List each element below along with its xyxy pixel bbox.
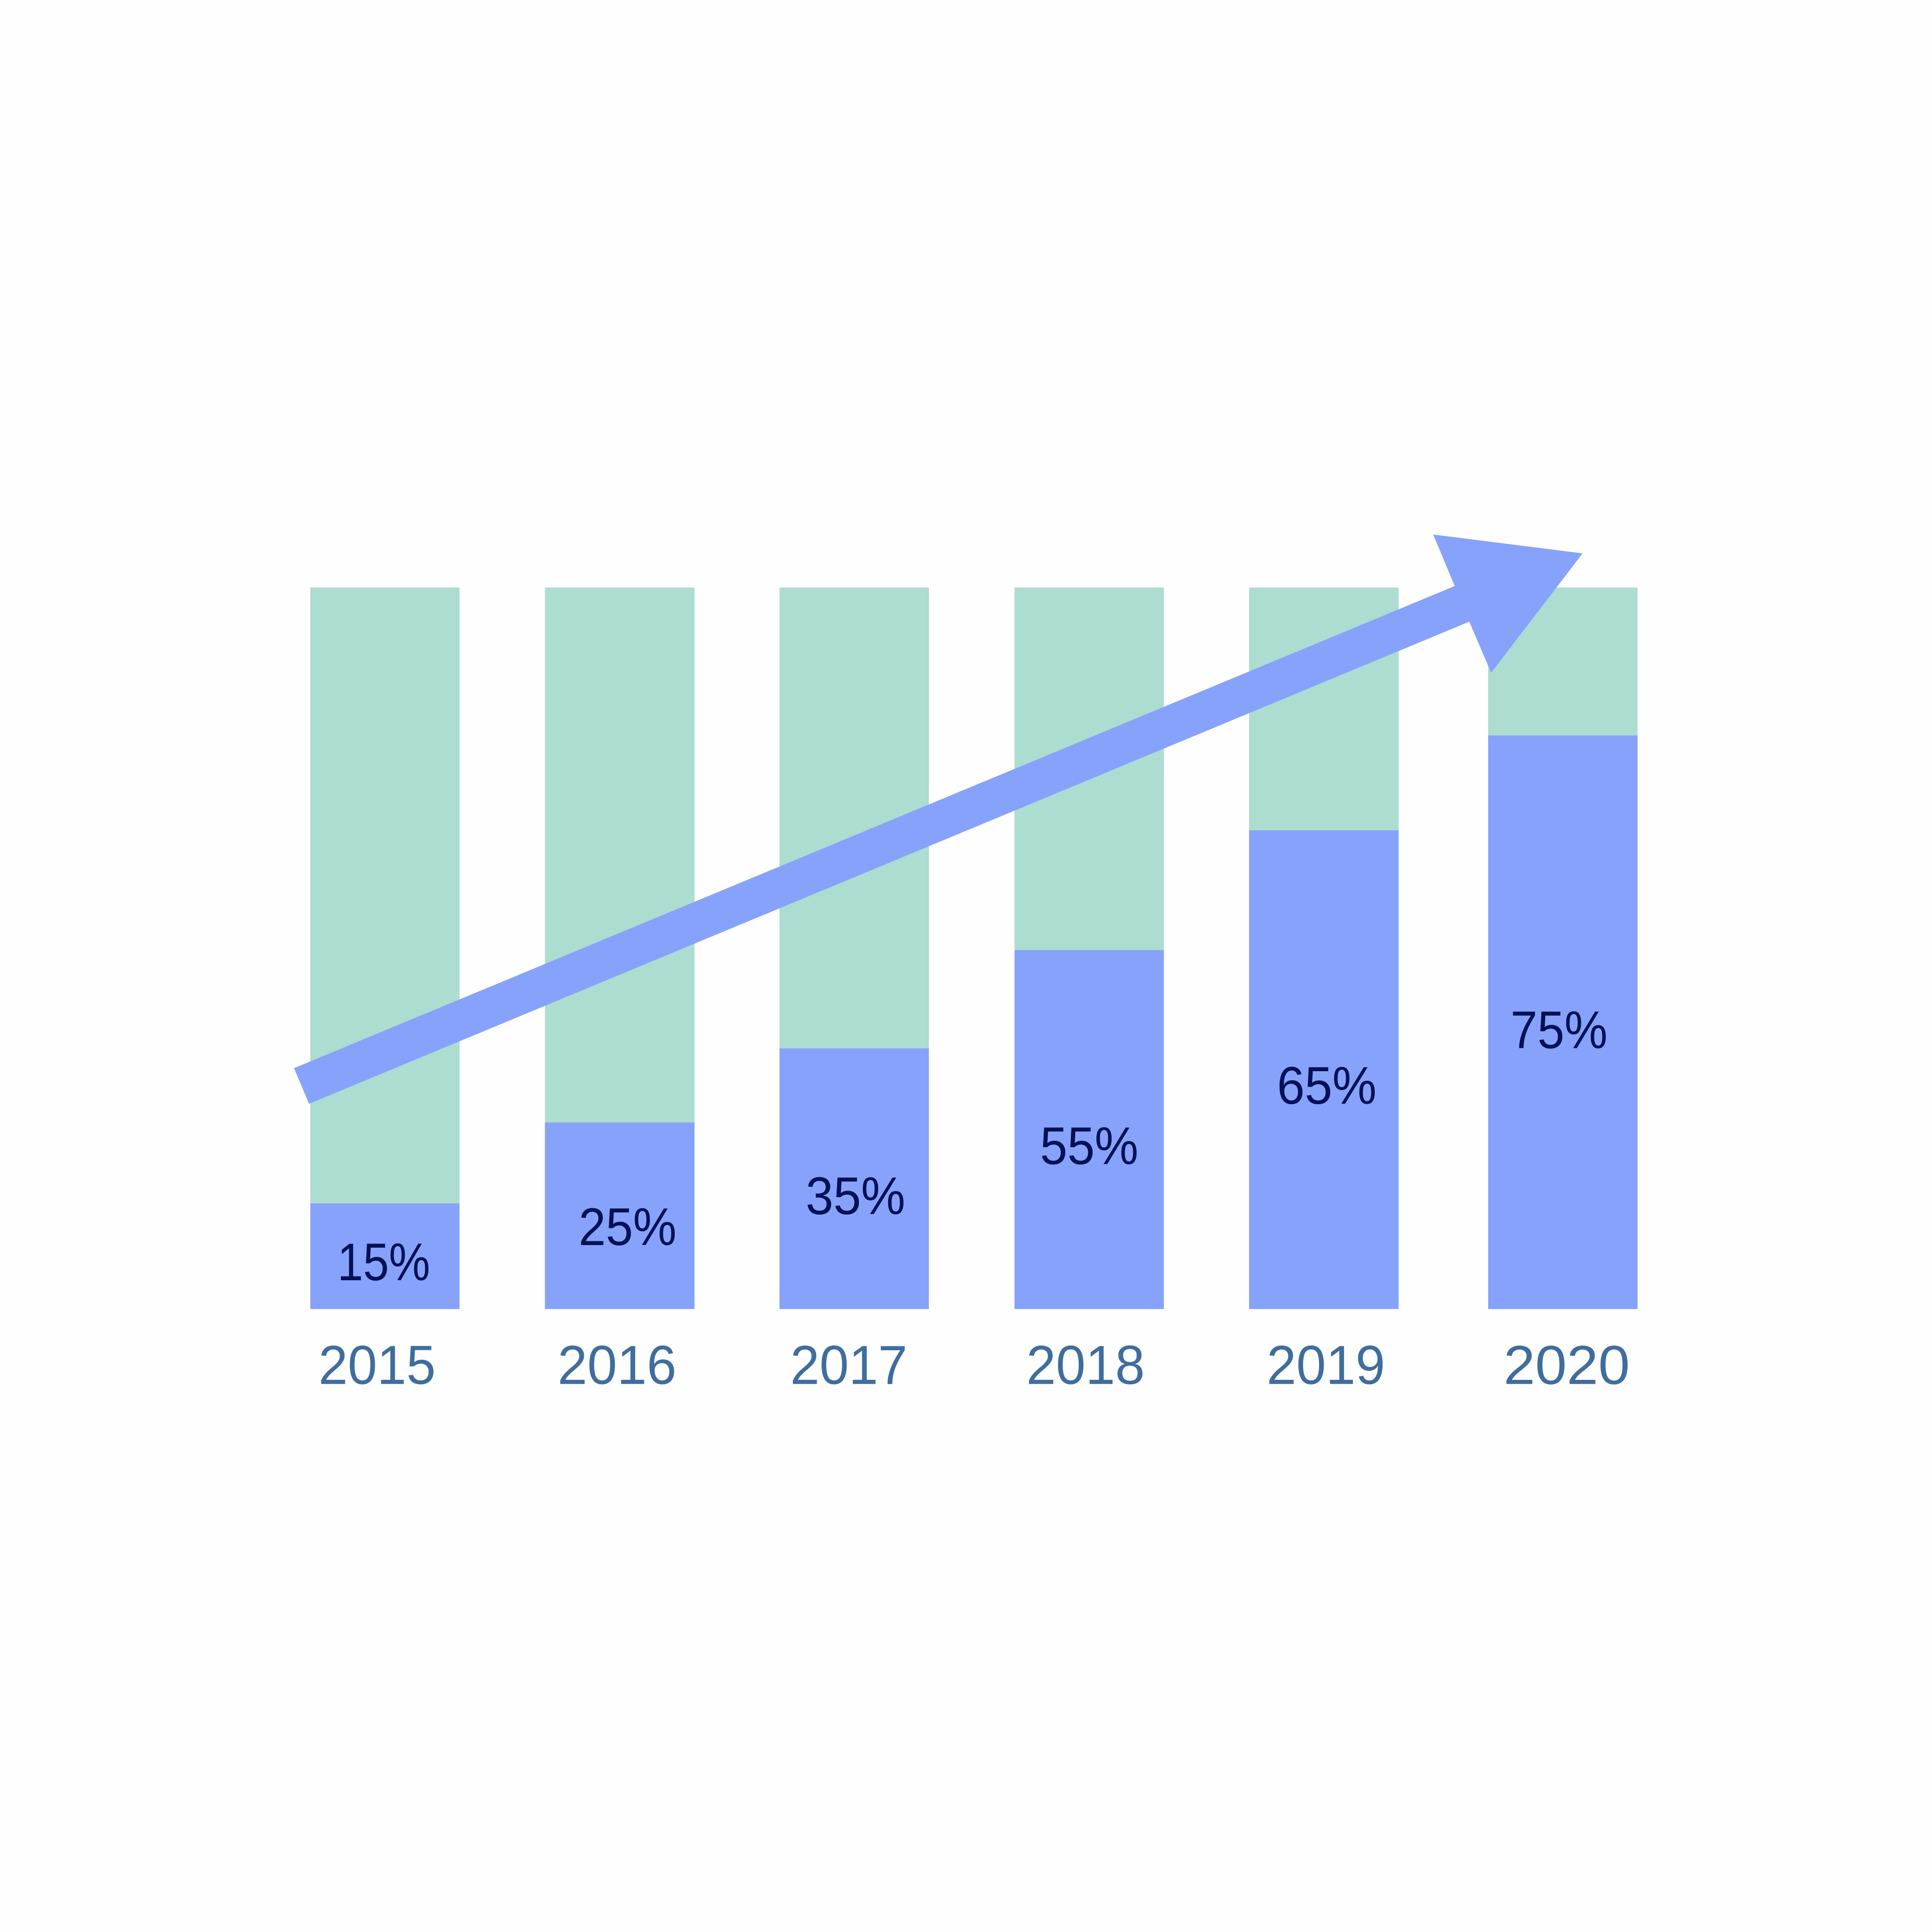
bar: 2015: [310, 587, 459, 1309]
arrow: upward trend: [294, 535, 1583, 1104]
year label: 2018: 2018: [1026, 1334, 1145, 1396]
bar: 2018: [1015, 587, 1164, 1309]
year label: 2017: 2017: [790, 1334, 907, 1396]
bar: 2017: [779, 587, 929, 1309]
value: 65%: 65%: [1277, 1056, 1377, 1115]
bar: 2020: [1488, 587, 1638, 1309]
bar: 2019: [1249, 587, 1398, 1309]
value: 35%: 35%: [806, 1166, 905, 1226]
value: 25%: 25%: [579, 1197, 676, 1257]
year label: 2019: 2019: [1267, 1334, 1385, 1396]
value: 75%: 75%: [1510, 1000, 1607, 1060]
bar: 2016: [545, 587, 695, 1309]
value: 55%: 55%: [1040, 1116, 1138, 1176]
year label: 2016: 2016: [558, 1334, 676, 1396]
value: 15%: 15%: [337, 1233, 430, 1292]
year label: 2020: 2020: [1504, 1334, 1630, 1396]
year label: 2015: 2015: [318, 1334, 436, 1396]
